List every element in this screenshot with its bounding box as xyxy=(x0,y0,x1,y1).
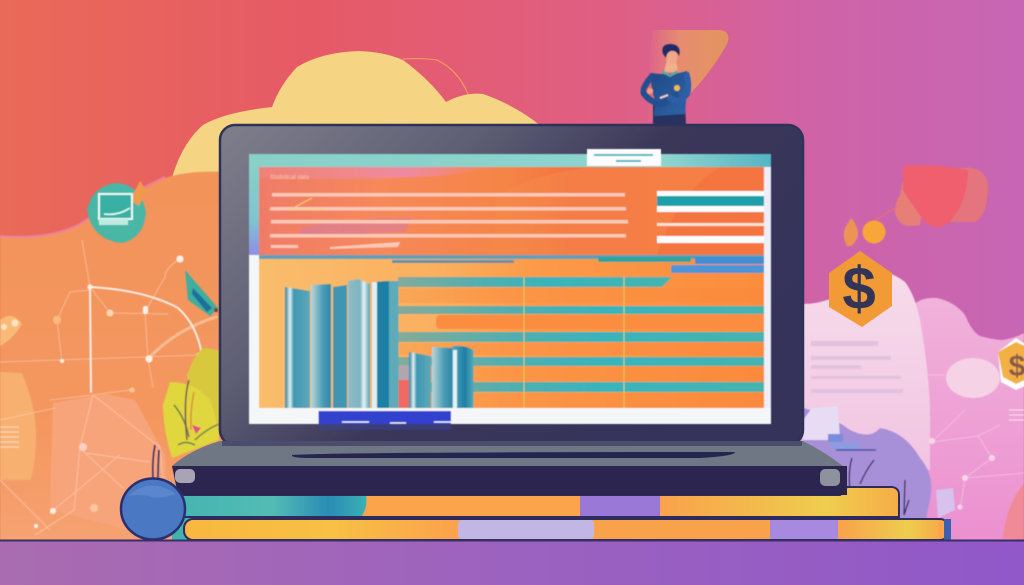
books stack xyxy=(172,487,951,540)
table rows xyxy=(398,277,764,408)
network lines xyxy=(0,240,216,535)
document lines xyxy=(811,341,903,393)
hair xyxy=(662,44,680,58)
lower book xyxy=(172,518,951,540)
peach panel xyxy=(50,394,170,540)
arms xyxy=(643,75,678,104)
laptop lid frame xyxy=(220,125,803,445)
blue bar under chart xyxy=(318,411,451,430)
laptop screen xyxy=(249,149,771,430)
bar chart large xyxy=(285,279,398,408)
collar xyxy=(662,70,678,77)
legs xyxy=(653,104,686,125)
upper orange panel xyxy=(259,167,764,255)
bar chart small xyxy=(409,346,474,408)
head xyxy=(666,49,678,65)
yellow plant xyxy=(153,348,219,478)
network nodes xyxy=(34,256,203,528)
red abstract blob xyxy=(872,165,988,227)
panel label: Statistical data xyxy=(270,175,310,181)
header strip xyxy=(259,255,764,259)
upper book xyxy=(178,487,899,517)
pale oval xyxy=(946,358,1000,398)
text lines xyxy=(270,193,628,249)
pink network xyxy=(920,375,1024,510)
lower chart area xyxy=(259,255,764,408)
orange triangle behind person xyxy=(646,30,728,124)
icon: teal pencil xyxy=(185,270,218,316)
neck xyxy=(664,60,678,72)
tab xyxy=(587,149,661,166)
orange hill with network (left) xyxy=(0,172,225,540)
coin shapes xyxy=(844,218,886,246)
small peach ornament xyxy=(0,316,22,346)
screen top band xyxy=(249,154,771,167)
lavender bush with stacked blocks xyxy=(803,406,955,525)
red corner shape xyxy=(1003,483,1024,540)
icon: dollar hexagon xyxy=(829,251,892,327)
torso xyxy=(651,71,689,116)
person standing on laptop xyxy=(643,44,689,125)
blue ball xyxy=(121,478,185,540)
icon: dollar hexagon: $ xyxy=(842,255,876,322)
plant stems xyxy=(174,380,219,445)
pale cloud with document lines (right) xyxy=(800,270,1024,540)
peach tall shape with lines xyxy=(0,372,36,480)
floor xyxy=(0,540,1024,585)
right table xyxy=(657,191,764,243)
yellow cloud behind laptop xyxy=(170,51,541,200)
icon: small dollar hexagon xyxy=(998,338,1024,390)
laptop base deck xyxy=(172,441,847,495)
icon: teal computer badge xyxy=(87,181,146,243)
laptop xyxy=(172,125,847,495)
